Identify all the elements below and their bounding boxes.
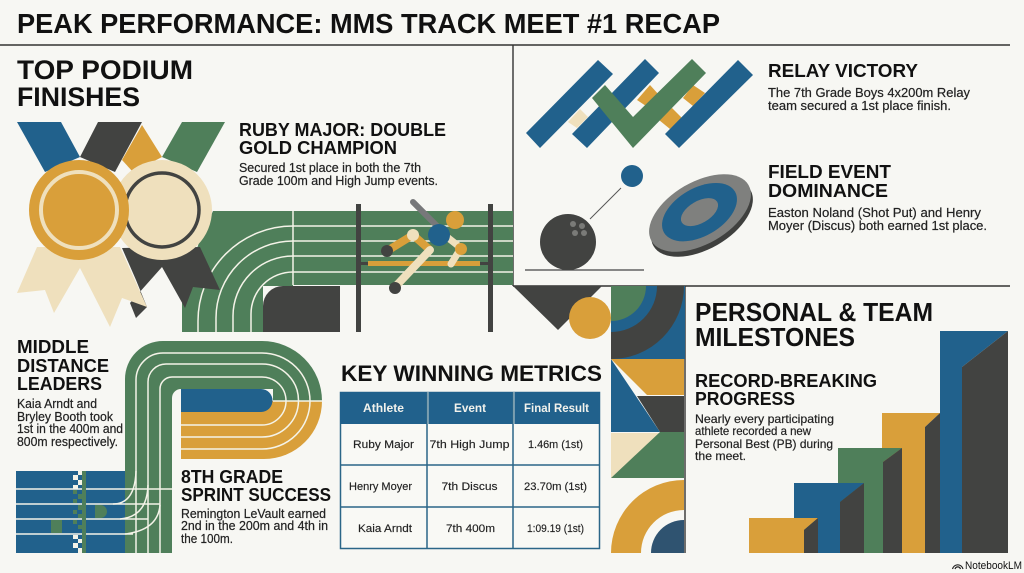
- text: 8th grade sprint success: Remington LeVault earned: [181, 507, 326, 521]
- text: ruby major: RUBY MAJOR: DOUBLE: [239, 120, 446, 140]
- text: 8th grade sprint success: [181, 467, 331, 546]
- illustration: curved running track: [16, 341, 322, 553]
- chart: rising steps: [749, 331, 1008, 553]
- heading: personal and team milestones: [695, 297, 933, 352]
- text: relay victory: [768, 61, 971, 113]
- panel: key winning metrics: [340, 361, 602, 549]
- table: results: 7th 400m: [446, 523, 495, 535]
- text: field event dominance: [768, 162, 987, 233]
- heading: personal and team milestones: MILESTONES: [695, 322, 855, 352]
- heading: personal and team milestones: PERSONAL & TEAM: [695, 297, 933, 327]
- icon: medals: [17, 122, 225, 327]
- heading: key winning metrics: KEY WINNING METRICS: [341, 361, 602, 386]
- text: middle distance leaders: DISTANCE: [17, 356, 109, 376]
- panel: middle distance and sprint: [16, 337, 331, 553]
- text: middle distance leaders: MIDDLE: [17, 337, 89, 357]
- table: results: 23.70m (1st): [524, 481, 587, 493]
- table: results: 7th High Jump: [430, 439, 510, 451]
- text: record-breaking progress: [695, 371, 877, 463]
- text: field event dominance: Moyer (Discus) both earned 1st place.: [768, 219, 987, 233]
- table: results: [340, 392, 600, 549]
- heading: top podium finishes: FINISHES: [17, 82, 140, 112]
- text: record-breaking progress: PROGRESS: [695, 389, 795, 409]
- text: 8th grade sprint success: SPRINT SUCCESS: [181, 485, 331, 505]
- text: relay victory: The 7th Grade Boys 4x200m Relay: [768, 86, 971, 100]
- text: field event dominance: DOMINANCE: [768, 181, 888, 201]
- table: results: 7th Discus: [442, 481, 498, 493]
- text: 8th grade sprint success: 2nd in the 200m and 4th in: [181, 519, 328, 533]
- heading: top podium finishes: TOP PODIUM: [17, 55, 193, 85]
- table: results: Kaia Arndt: [358, 523, 412, 535]
- text: middle distance leaders: LEADERS: [17, 374, 102, 394]
- text: 8th grade sprint success: the 100m.: [181, 532, 233, 546]
- text: record-breaking progress: athlete recorded a new: [695, 424, 811, 438]
- table: results: Henry Moyer: [349, 481, 412, 493]
- decorative geometric column: [513, 213, 685, 553]
- text: relay victory: team secured a 1st place finish.: [768, 99, 951, 113]
- table: results: Event: [454, 403, 486, 415]
- text: field event dominance: Easton Noland (Shot Put) and Henry: [768, 206, 982, 220]
- text: middle distance leaders: 1st in the 400m and: [17, 422, 123, 436]
- text: middle distance leaders: Bryley Booth took: [17, 410, 114, 424]
- text: middle distance leaders: Kaia Arndt and: [17, 397, 97, 411]
- title: PEAK PERFORMANCE: MMS TRACK MEET #1 RECAP: [17, 8, 720, 39]
- text: middle distance leaders: [17, 337, 123, 449]
- table: results: Athlete: [363, 403, 404, 415]
- finish line checks: [51, 471, 107, 553]
- panel: top podium finishes: [17, 55, 513, 332]
- heading: top podium finishes: [17, 55, 193, 112]
- text: field event dominance: FIELD EVENT: [768, 162, 891, 182]
- panel: relay and field events: [525, 59, 987, 273]
- table: results: 1.46m (1st): [528, 439, 583, 451]
- icon: shot put: [525, 165, 644, 270]
- table: results: 1:09.19 (1st): [527, 523, 584, 535]
- table: results: Final Result: [524, 403, 589, 415]
- text: record-breaking progress: Nearly every participating: [695, 412, 834, 426]
- text: relay victory: RELAY VICTORY: [768, 61, 918, 81]
- panel: personal and team milestones: [695, 297, 1008, 553]
- icon: discus: [635, 158, 767, 273]
- text: record-breaking progress: the meet.: [695, 449, 746, 463]
- icon: high jump bar and athlete: [356, 202, 493, 332]
- track illustration: [182, 211, 513, 332]
- text: 8th grade sprint success: 8TH GRADE: [181, 467, 283, 487]
- text: middle distance leaders: 800m respectively.: [17, 435, 118, 449]
- table: results: Ruby Major: [353, 439, 414, 451]
- text: ruby major: GOLD CHAMPION: [239, 138, 397, 158]
- text: record-breaking progress: RECORD-BREAKING: [695, 371, 877, 391]
- text: ruby major: Grade 100m and High Jump events.: [239, 174, 438, 188]
- text: ruby major: Secured 1st place in both the 7th: [239, 161, 421, 175]
- icon: relay batons: [526, 59, 753, 148]
- text: record-breaking progress: Personal Best (PB) during: [695, 437, 833, 451]
- text: ruby major: [239, 120, 446, 188]
